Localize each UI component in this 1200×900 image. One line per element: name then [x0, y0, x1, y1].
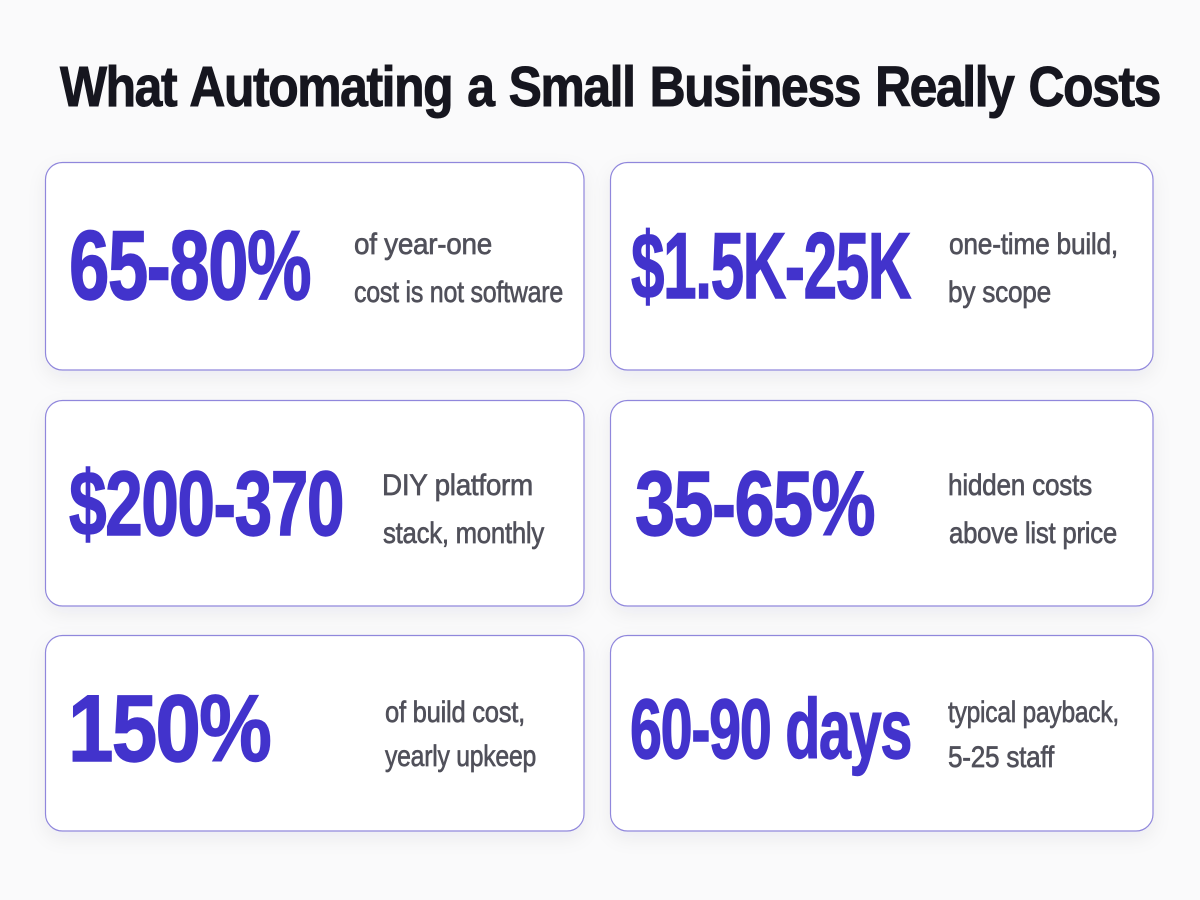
- panel: 150% yearly upkeep: [46, 636, 584, 831]
- description: DIY platform stack, monthly: [382, 469, 544, 550]
- description: DIY platform stack, monthly: stack, monthly: [383, 517, 544, 550]
- description: one-time build, by scope: one-time build,: [949, 228, 1118, 261]
- description: of build cost, yearly upkeep: of build cost,: [385, 696, 525, 729]
- description: of year-one cost is not software: cost is not software: [354, 276, 563, 309]
- description: of build cost, yearly upkeep: yearly upkeep: [385, 740, 536, 773]
- panel: $200-370 DIY platform stack: [46, 400, 584, 606]
- stat: 60-90 days: 60-90 days: [630, 682, 911, 776]
- description: of build cost, yearly upkeep: [385, 696, 536, 773]
- description: hidden costs above list price: [948, 469, 1117, 550]
- description: of year-one cost is not software: of year-one: [354, 228, 492, 261]
- description: DIY platform stack, monthly: DIY platform: [382, 469, 533, 502]
- panel: 65-80% of year-one cost: [46, 162, 584, 370]
- stat: 65-80%: 65-80%: [69, 210, 310, 320]
- panel: 35-65% hidden costs: [610, 400, 1153, 606]
- description: typical payback, 5-25 staff: 5-25 staff: [948, 741, 1055, 774]
- description: typical payback, 5-25 staff: [948, 696, 1119, 774]
- stat: $1.5K-25K: $1.5K-25K: [631, 213, 911, 318]
- description: one-time build, by scope: by scope: [948, 276, 1051, 309]
- panel: 60-90 days payback: [610, 636, 1153, 831]
- description: one-time build, by scope: [948, 228, 1118, 309]
- stat: 35-65%: 35-65%: [635, 453, 874, 555]
- panel: $1.5K-25K one-time build: [610, 162, 1153, 370]
- stat: $200-370: $200-370: [69, 453, 343, 555]
- description: of year-one cost is not software: [354, 228, 563, 309]
- description: typical payback, 5-25 staff: typical payback,: [948, 696, 1119, 729]
- description: hidden costs above list price: hidden costs: [948, 469, 1092, 502]
- stat: 150%: 150%: [68, 676, 270, 782]
- description: hidden costs above list price: above list price: [949, 517, 1117, 550]
